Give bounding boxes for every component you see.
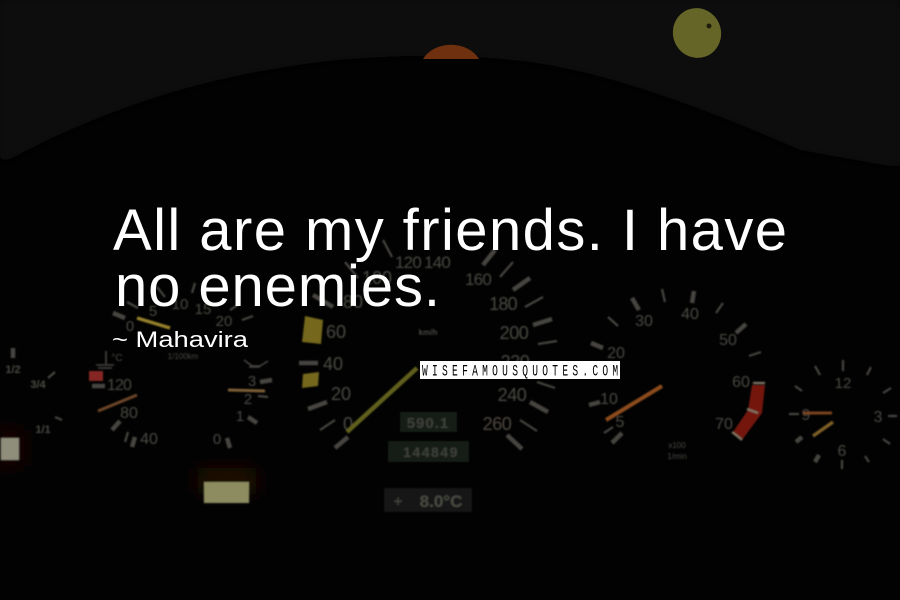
fuel warning light [1,438,19,460]
fuel consumption gauge [113,283,253,361]
trip odometer display: 590.1 [407,415,449,432]
fuel gauge ticks [13,348,62,420]
fuel gauge labels: 1/1 [35,424,51,436]
speedometer labels: 220 [501,352,530,372]
tachometer labels: 50 [719,332,737,349]
speedometer labels: 200 [500,323,529,343]
quote line 2: no enemies. [115,254,440,319]
tachometer labels: 40 [681,306,699,323]
speedometer labels: 80 [343,292,363,312]
oil needle [228,390,265,391]
speedometer labels: 140 [424,253,450,272]
fuel warning glow [0,430,24,466]
oil labels: 3 [248,373,256,390]
consumption labels: 10 [172,296,188,313]
temperature display: 8.0°C [420,492,462,511]
oil labels: 1 [236,408,244,425]
consumption labels: 1/100km [168,352,199,361]
tachometer [589,289,765,461]
speedometer labels: 60 [326,322,346,342]
tachometer labels: 60 [732,374,750,391]
tachometer labels: x100 [668,441,686,450]
speedometer labels: 260 [483,414,512,434]
speedometer labels: 40 [323,354,343,374]
tachometer labels: 5 [616,414,625,431]
fuel gauge [0,348,62,466]
yellow speed marker upper [302,316,323,344]
tachometer labels: 10 [600,391,618,408]
speedometer [299,240,557,449]
bottom warning glow [198,468,256,494]
quote line 1: All are my friends. I have [113,198,787,263]
clock numerals [802,375,883,460]
consumption labels: 0 [126,318,134,335]
oil labels: 0 [213,431,221,448]
tachometer labels: 1/min [667,452,687,461]
oil labels [213,373,256,448]
speedometer labels: 180 [489,294,518,314]
dashboard hood band [0,0,900,168]
speedometer labels: 100 [362,268,392,288]
consumption needle [137,318,170,328]
thermometer icon [96,351,114,368]
tachometer labels [600,306,750,461]
hour hand [813,422,833,436]
clock numerals: 12 [835,375,851,392]
yellow round light [666,1,728,65]
temperature red zone [89,371,103,381]
oil can icon [244,360,268,367]
clock numerals: 9 [802,407,811,424]
tachometer labels: 30 [635,313,653,330]
yellow speed marker lower [302,372,319,388]
fuel gauge labels: 3/4 [30,379,47,391]
oil pressure gauge [213,360,272,448]
consumption ticks [113,283,253,320]
tachometer labels: 20 [607,345,625,362]
consumption labels [126,296,232,361]
tachometer needle [606,386,662,420]
dashboard gauges [0,240,897,512]
quote text [113,198,787,319]
clock ticks [789,360,897,469]
oil ticks [227,380,272,448]
tachometer ticks [589,289,761,443]
consumption labels: 5 [149,303,157,320]
speedometer labels: 120 [395,253,421,272]
total odometer display: 144849 [403,444,459,460]
temperature display [384,488,472,512]
clock [789,360,897,469]
speedometer needle [347,368,417,432]
temperature labels: 80 [120,405,138,422]
red zone marks [732,383,765,440]
speedometer labels: 160 [465,270,491,289]
orange warning light [423,45,479,59]
temperature display: + [394,493,403,510]
speedometer ticks [299,240,557,449]
fuel gauge labels [5,364,51,436]
speedometer labels: 20 [331,384,351,404]
temperature ticks [92,386,135,447]
temperature labels [107,353,158,448]
speedometer labels: 0 [343,414,353,434]
tachometer labels: 70 [715,416,733,433]
consumption labels: 15 [195,301,211,318]
clock numerals: 3 [874,409,883,426]
coolant temperature gauge [89,351,158,448]
bottom warning light [204,482,249,503]
author attribution: ~ Mahavira [112,327,249,352]
clock numerals: 6 [838,443,847,460]
consumption labels: 20 [216,313,232,330]
watermark banner: WISEFAMOUSQUOTES.COM [422,362,618,380]
oil labels: 2 [244,391,252,408]
trip odometer display [400,412,457,432]
temperature labels: °C [111,353,123,364]
temperature labels: 120 [107,377,132,394]
tachometer red zone [733,385,765,440]
temperature labels: 40 [140,431,158,448]
speedometer labels [323,253,530,434]
speedometer labels: 240 [498,385,527,405]
speedometer labels: km/h [419,328,437,337]
minute hand [803,412,832,414]
temperature needle [98,395,137,411]
fuel gauge labels: 1/2 [5,364,21,376]
total odometer display [388,441,469,462]
